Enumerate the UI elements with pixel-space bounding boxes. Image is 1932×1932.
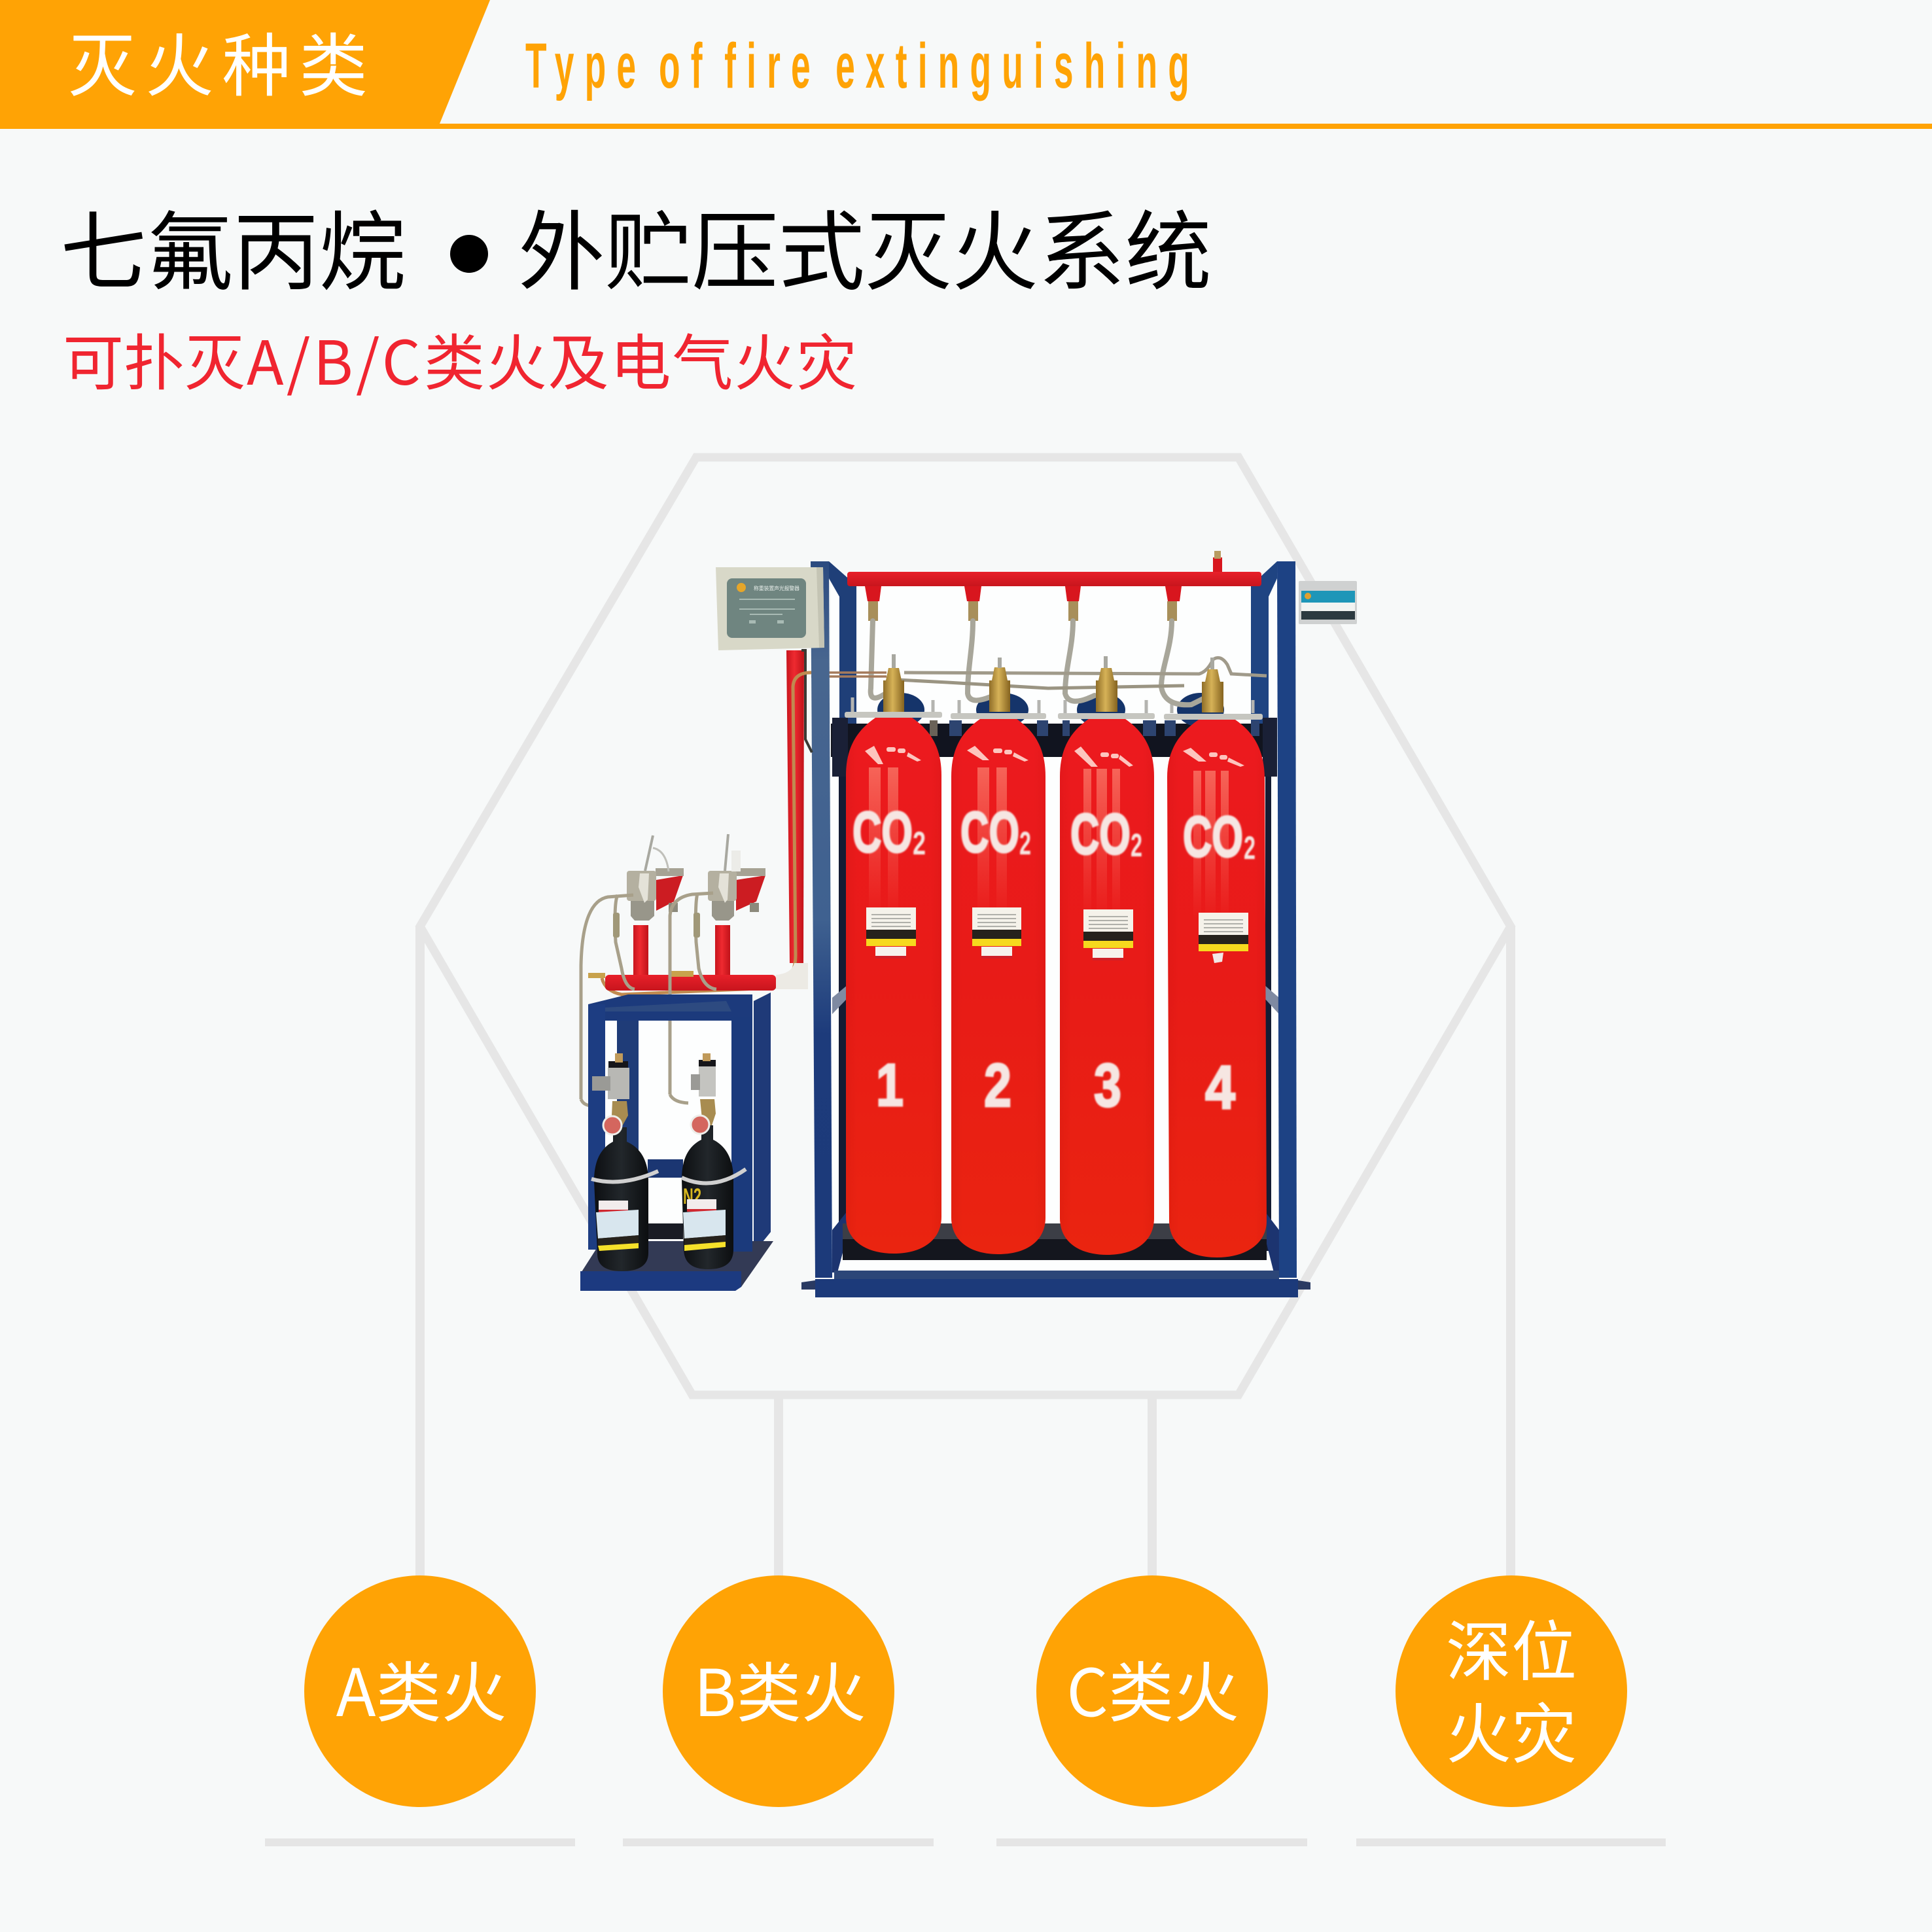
subheading: A/B/C: [247, 314, 421, 402]
support plates and brass valves: [845, 654, 1263, 720]
header english title: Type: [525, 30, 646, 101]
main heading: [60, 183, 1212, 308]
nitrogen cylinder left: [591, 1053, 658, 1271]
fire class circle: deep-seated: [1396, 1575, 1627, 1807]
cylinder 4: CO: [1183, 804, 1243, 869]
fire class circle: A: [304, 1575, 536, 1807]
nitrogen cylinder right: [682, 1053, 746, 1269]
cylinder 3: CO: [1070, 801, 1131, 866]
front frame posts and base: [801, 561, 1310, 1297]
valve head 2: [708, 834, 765, 921]
top red manifold: [847, 551, 1261, 621]
N2 marking: N2: [683, 1184, 701, 1209]
cylinder 3: 3: [1094, 1051, 1121, 1119]
header title: 灭火种类: [68, 11, 368, 111]
fire class circle: C: C类火: [1066, 1640, 1239, 1735]
cylinder 3: 2: [1131, 827, 1142, 864]
small stand frame: [580, 992, 773, 1291]
flexible hoses and tubes: [811, 621, 1267, 705]
equipment photo: fire extinguishing system: [580, 551, 1357, 1297]
lower red manifold with selector valves: [581, 834, 776, 1106]
main heading: 外贮压式灭火系统: [518, 183, 1212, 308]
fire class circle: B: B类火: [694, 1641, 866, 1735]
cylinder 2: 2: [1019, 825, 1031, 862]
connector lines: [415, 926, 1515, 1581]
tank domes and bolts behind plates: [852, 693, 1259, 736]
header english title: fire: [724, 30, 821, 101]
hexagon outline: [420, 457, 1511, 1395]
fire class circle: deep-seated: 深位: [1446, 1599, 1577, 1694]
nitrogen cylinders: [591, 1053, 746, 1271]
CO2 cylinders: [846, 718, 1267, 1257]
cylinder 3: [1060, 719, 1154, 1255]
rear frame: [829, 561, 1279, 1280]
cylinder 1: [846, 718, 941, 1254]
cylinder 1: 2: [913, 825, 926, 862]
fire class circle: C: [1036, 1575, 1268, 1807]
cylinder 4: 4: [1205, 1053, 1235, 1121]
cylinder 4: 2: [1244, 830, 1256, 866]
header english title: extinguishing: [835, 30, 1200, 101]
panel logo: [737, 583, 746, 592]
main heading: 七氟丙烷: [60, 183, 406, 308]
header band: [0, 0, 1932, 129]
cylinder 2: [951, 719, 1045, 1254]
fire class circle: deep-seated: 火灾: [1446, 1681, 1577, 1776]
fire class circle: B: [663, 1575, 894, 1807]
cylinder 2: 2: [984, 1051, 1011, 1119]
valve head 1: [627, 835, 684, 921]
header english title: of: [659, 30, 713, 101]
subheading: [63, 314, 857, 402]
cylinder 2: CO: [960, 799, 1019, 864]
cylinder 4: [1167, 720, 1267, 1257]
fire class circle: A: A类火: [336, 1640, 506, 1735]
white photo backing: [605, 576, 1282, 1276]
cylinder 1: 1: [876, 1052, 904, 1119]
equipment nameplate: [1299, 581, 1357, 624]
subheading: 可扑灭: [63, 314, 245, 402]
underline bars: [265, 1838, 1666, 1846]
alarm control panel: [716, 567, 824, 650]
cylinder 1: CO: [852, 799, 913, 864]
stand deck: [580, 1241, 773, 1287]
panel title: 称重装置声光报警器: [754, 585, 799, 592]
subheading: 类火及电气火灾: [424, 314, 857, 402]
riser pipe to lower manifold: [602, 650, 812, 994]
